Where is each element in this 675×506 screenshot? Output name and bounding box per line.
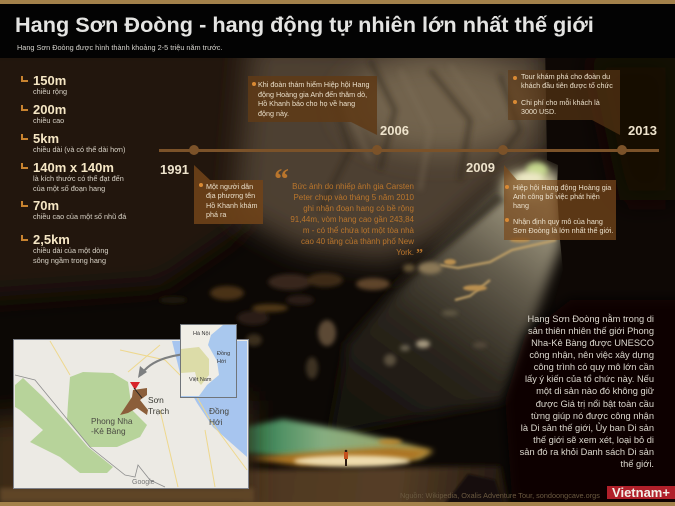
quote text: ghi nhận đoạn hang có bề rộng bbox=[303, 204, 414, 213]
stat: 200m: chiều cao bbox=[33, 116, 64, 125]
paragraph: UNESCO heritage note: sản đó ra khỏi Danh sách Di sản bbox=[520, 447, 654, 457]
paragraph: UNESCO heritage note: lấy ý kiến của tổ chức này. Nếu bbox=[525, 374, 654, 384]
paragraph: UNESCO heritage note: là Di sản thế giới, Ủy ban Di sản bbox=[521, 423, 654, 433]
arrow from inset bbox=[141, 354, 205, 375]
timeline axis bbox=[159, 148, 659, 152]
quote text: m - có thể chứa lọt một tòa nhà bbox=[303, 226, 414, 235]
inset map: Vietnam: Hà Nội bbox=[193, 331, 210, 337]
stat: 2,5km: 2,5km bbox=[33, 232, 70, 247]
stat: 200m bbox=[21, 102, 66, 125]
paragraph: UNESCO heritage note: một di sản nào đó không giữ bbox=[536, 386, 654, 396]
paragraph: UNESCO heritage note: từng giúp nó được công nhận bbox=[531, 411, 654, 421]
stat: 2,5km: sông ngầm trong hang bbox=[33, 256, 106, 265]
paragraph: UNESCO heritage note: sản thiên nhiên thế giới Phong bbox=[528, 326, 654, 336]
callout: 2009: Hiệp hội Hang động Hoàng gia bbox=[513, 183, 611, 192]
callout: 2009: Sơn Đoòng là lớn nhất thế giới. bbox=[513, 226, 613, 235]
callout: 2013: Chi phí cho mỗi khách là bbox=[521, 98, 600, 107]
timeline bbox=[159, 145, 659, 155]
paragraph: UNESCO heritage note: Hang Sơn Đoòng nằm trong di bbox=[527, 314, 654, 324]
map label: Google: Google bbox=[132, 479, 155, 486]
lake bbox=[240, 419, 434, 463]
inset map: Vietnam: Hới bbox=[217, 359, 226, 365]
rock pile bbox=[159, 262, 487, 379]
border line bbox=[15, 375, 165, 487]
inset map: Vietnam bbox=[180, 324, 237, 398]
paragraph: UNESCO heritage note: thế giới. bbox=[620, 459, 654, 469]
callout: 2013: khách đầu tiên được tổ chức bbox=[521, 81, 613, 90]
stat: 5km bbox=[21, 131, 125, 154]
stat: 70m bbox=[21, 198, 126, 221]
stat: 150m: chiều rộng bbox=[33, 87, 67, 96]
roads bbox=[50, 341, 247, 487]
stat: 5km: chiều dài (và có thể dài hơn) bbox=[33, 145, 125, 154]
callout: 2013: Tour khám phá cho đoàn du bbox=[521, 72, 610, 81]
stat list: cave dimensions bbox=[21, 73, 126, 265]
opening quote mark: “ bbox=[274, 163, 289, 196]
callout: 2006: động Hoàng gia Anh đến thăm dò, bbox=[258, 90, 367, 99]
stat: 70m: 70m bbox=[33, 198, 59, 213]
stat: 5km: 5km bbox=[33, 131, 59, 146]
stat: 140m x 140m bbox=[21, 160, 124, 193]
person silhouette bbox=[344, 450, 348, 466]
callout: 2009: Anh công bố việc phát hiện bbox=[513, 192, 600, 201]
map label: Đồng Hới: Đồng bbox=[209, 406, 229, 416]
stat: 150m bbox=[21, 73, 67, 96]
callout: 2006: Hồ Khanh báo cho họ về hang bbox=[258, 99, 355, 108]
header band bbox=[0, 4, 675, 58]
marker 1991 bbox=[188, 145, 198, 155]
year 2013: 2013 bbox=[628, 123, 657, 138]
callout: 2006: động này. bbox=[258, 109, 289, 118]
inset map: Vietnam: Việt Nam bbox=[189, 377, 212, 383]
stat: 150m: 150m bbox=[33, 73, 66, 88]
pull quote bbox=[274, 163, 423, 262]
stat: 140m x 140m: 140m x 140m bbox=[33, 160, 114, 175]
title: Hang Sơn Đoòng - hang động tự nhiên lớn nhất thế giới bbox=[15, 12, 594, 37]
map drawing: Hới bbox=[209, 417, 223, 427]
paragraph: UNESCO heritage note: được Giá trị nổi bật toàn cầu bbox=[536, 399, 654, 409]
year 1991: 1991 bbox=[160, 162, 189, 177]
marker 2009 bbox=[498, 145, 508, 155]
quote text: Peter chụp vào tháng 5 năm 2010 bbox=[293, 193, 414, 202]
callout: 2009 bbox=[504, 165, 616, 240]
map drawing: -Kẻ Bàng bbox=[91, 426, 126, 436]
inset map: Vietnam: Đồng bbox=[217, 351, 230, 357]
callout: 2013: 3000 USD. bbox=[521, 107, 556, 116]
stat: 2,5km: chiều dài của một dòng bbox=[33, 246, 108, 255]
source line: Nguồn: Wikipedia, Oxalis Adventure Tour, sondoongcave.orgs bbox=[400, 491, 600, 500]
top gold bar bbox=[0, 0, 675, 4]
bottom gold bar bbox=[0, 502, 675, 506]
marker 2013 bbox=[617, 145, 627, 155]
map drawing bbox=[15, 340, 248, 488]
year 2006: 2006 bbox=[380, 123, 409, 138]
callout: 1991: phá ra bbox=[206, 210, 226, 219]
stat: 140m x 140m: của một số đoạn hang bbox=[33, 184, 105, 193]
callout: 2009: Nhận định quy mô của hang bbox=[513, 217, 603, 226]
paragraph: UNESCO heritage note: Nha-Kẻ Bàng được UNESCO bbox=[531, 338, 654, 348]
map label: Sơn Trạch: Sơn bbox=[148, 395, 164, 405]
map panel bbox=[13, 339, 249, 489]
callout: 2006: Khi đoàn thám hiểm Hiệp hội Hang bbox=[258, 80, 369, 89]
red flag marker bbox=[130, 382, 142, 398]
callout: 2006 bbox=[248, 76, 377, 135]
paragraph: UNESCO heritage note: công nhận, nên việc xây dựng bbox=[529, 350, 654, 360]
callout: 1991 bbox=[194, 165, 263, 224]
year 2009: 2009 bbox=[466, 160, 495, 175]
callout: 2013 bbox=[508, 70, 620, 135]
quote text: cao 40 tầng của thành phố New bbox=[301, 237, 414, 246]
map drawing: Trạch bbox=[148, 406, 169, 416]
sea bbox=[172, 341, 247, 457]
logo: Vietnam+: Vietnam+ bbox=[612, 485, 670, 500]
national park area bbox=[15, 372, 147, 473]
stat: 200m: 200m bbox=[33, 102, 66, 117]
paragraph: UNESCO heritage note bbox=[520, 314, 654, 469]
callout: 2009: hang bbox=[513, 201, 529, 210]
quote text bbox=[290, 182, 414, 257]
paragraph: UNESCO heritage note: thế giới sẽ xem xét, loại bỏ di bbox=[533, 435, 654, 445]
callout: 1991: Một người dân bbox=[206, 182, 253, 191]
map label: Phong Nha: Phong Nha bbox=[91, 416, 133, 426]
stat: 70m: chiều cao của một số nhũ đá bbox=[33, 212, 126, 221]
Sơn Trạch area bbox=[120, 388, 148, 415]
quote text: Bức ảnh do nhiếp ảnh gia Carsten bbox=[292, 182, 414, 191]
stat: 140m x 140m: là kích thước có thể đạt đến bbox=[33, 174, 124, 183]
marker 2006 bbox=[372, 145, 382, 155]
subtitle: Hang Sơn Đoòng được hình thành khoảng 2-5 triệu năm trước. bbox=[17, 43, 222, 52]
callout: 1991: Hồ Khanh khám bbox=[206, 201, 258, 210]
quote text: York. bbox=[396, 248, 414, 257]
callout: 1991: địa phương tên bbox=[206, 191, 255, 200]
closing quote mark: ” bbox=[416, 247, 423, 262]
paragraph: UNESCO heritage note: công trình có quy mô lớn cần bbox=[534, 362, 654, 372]
quote text: 91,44m, vòm hang cao gần 243,84 bbox=[290, 215, 414, 224]
stat: 2,5km bbox=[21, 232, 108, 265]
